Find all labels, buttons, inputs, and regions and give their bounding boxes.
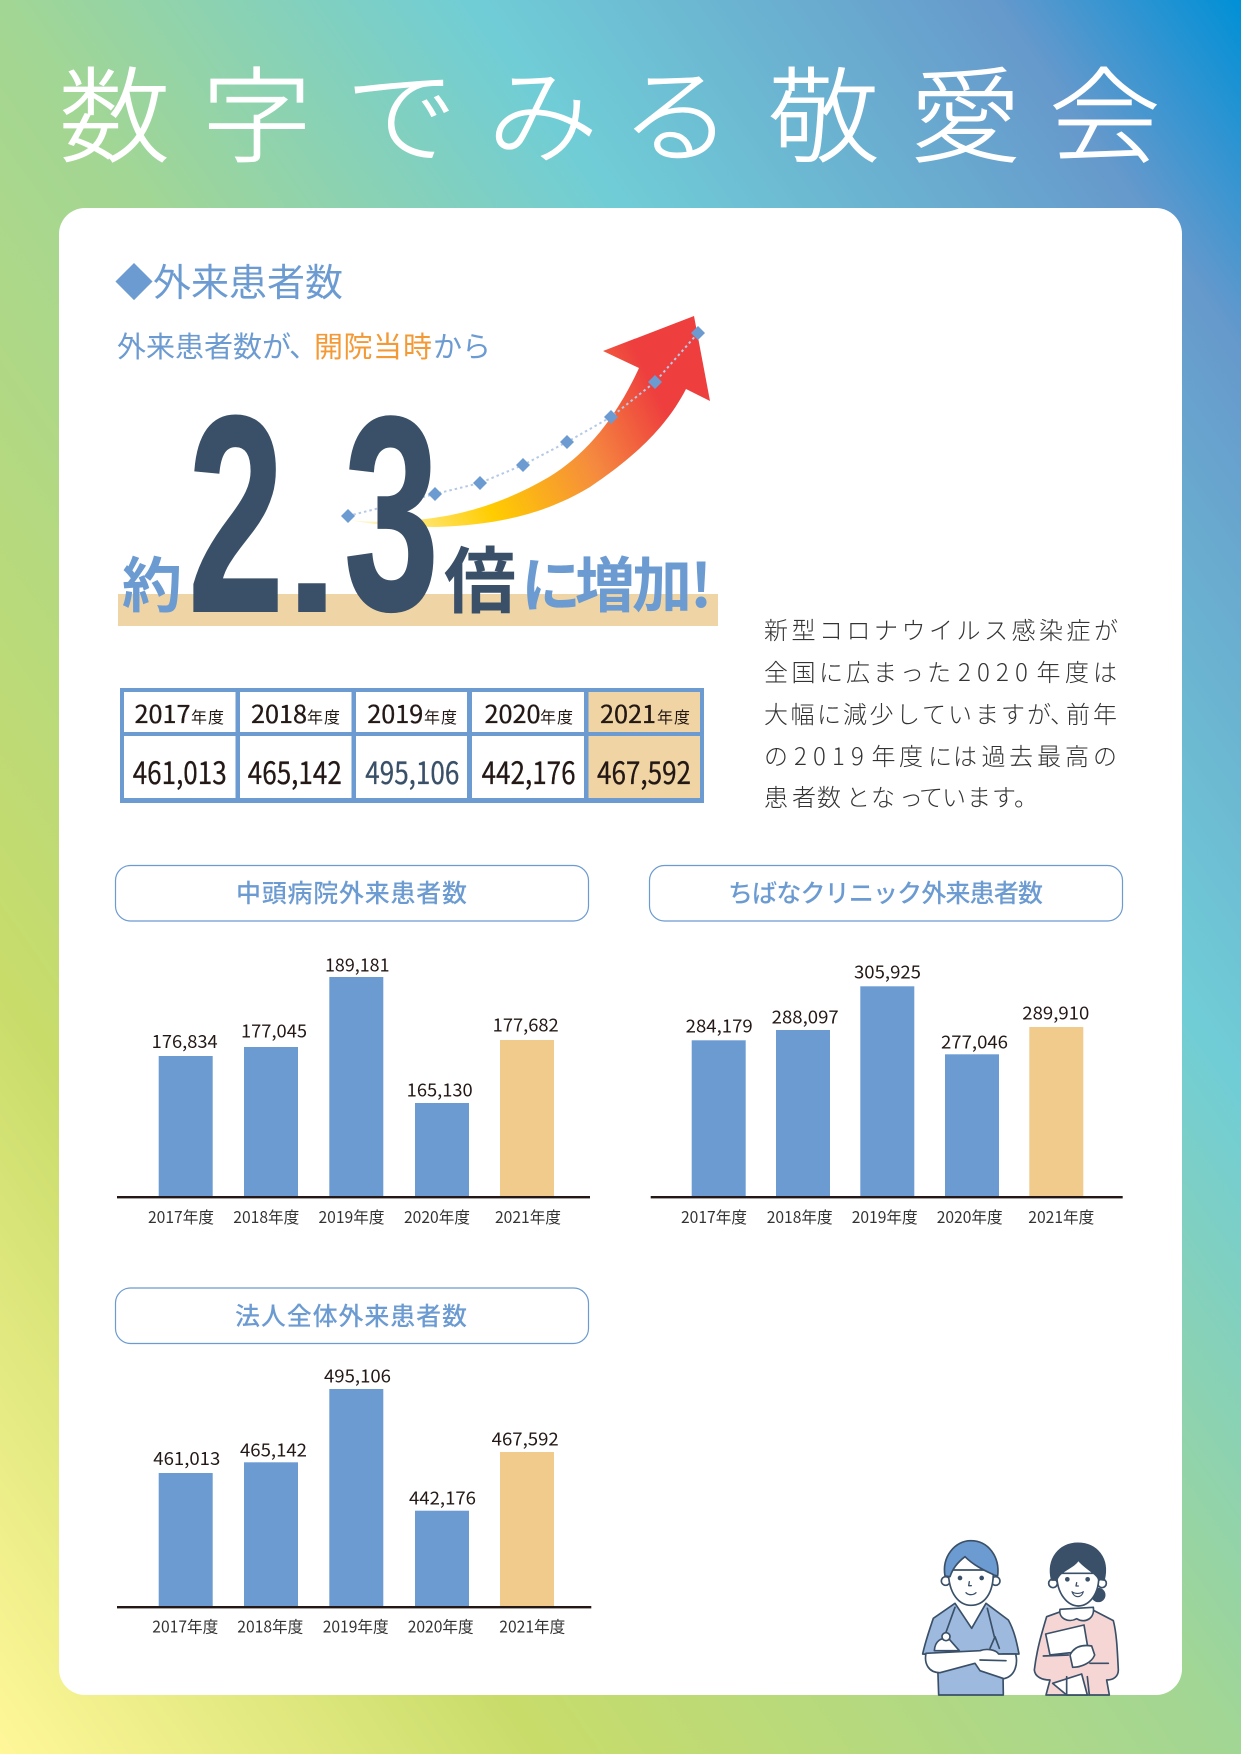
bar chart: Chibana clinic: 289,910 [1022, 999, 1089, 1025]
bar chart: Chibana clinic: 2018年度 [767, 1204, 833, 1228]
bar chart: whole corporation [117, 1362, 591, 1638]
bar chart: Nakagami hospital: 189,181 [325, 952, 390, 978]
text block: explanation: 全国に広まった2020年度は [764, 653, 1117, 688]
bar chart: whole corporation: 2020年度 [408, 1614, 474, 1638]
bar chart: whole corporation: 2017年度 [152, 1614, 218, 1638]
bar chart: Nakagami hospital: 2018年度 [233, 1204, 299, 1228]
bar chart: whole corporation: 2019年度 [323, 1614, 389, 1638]
headline: about 2.3 times increase: 2 [188, 359, 284, 671]
chart heading: whole corporation: 法人全体外来患者数 [235, 1297, 467, 1333]
icon: female nurse [1034, 1543, 1118, 1695]
bar chart: whole corporation: 2021年度 [499, 1614, 565, 1638]
chart heading: Chibana clinic [650, 866, 1122, 921]
table: yearly totals: 年度 [424, 704, 457, 728]
bar chart: whole corporation: 467,592 [492, 1426, 559, 1452]
icon: male nurse [923, 1541, 1019, 1695]
table: yearly totals: 2020 [484, 696, 540, 731]
bar chart: whole corporation: 2018年度 [237, 1614, 303, 1638]
heading: outpatient count: ◆外来患者数 [115, 252, 343, 307]
table: yearly totals: 467,592 [597, 748, 691, 793]
headline: about 2.3 times increase: 3 [344, 360, 439, 668]
table: yearly totals: 2021 [600, 696, 656, 731]
bar chart: Nakagami hospital: 2019年度 [318, 1204, 384, 1228]
bar chart: Chibana clinic [651, 958, 1123, 1228]
bar chart: Nakagami hospital [117, 952, 590, 1228]
table: yearly totals: 461,013 [133, 748, 227, 793]
bar chart: Chibana clinic: 2020年度 [937, 1204, 1003, 1228]
line chart: dotted trend with diamonds [341, 326, 705, 523]
text block: explanation [764, 611, 1118, 813]
table: yearly totals: 465,142 [248, 748, 342, 793]
bar chart: whole corporation: 461,013 [153, 1445, 220, 1471]
bar chart: Nakagami hospital: 176,834 [152, 1028, 218, 1054]
chart heading: Nakagami hospital: 中頭病院外来患者数 [236, 874, 467, 910]
text block: explanation: 大幅に減少していますが、前年 [764, 695, 1117, 730]
table: yearly totals: 2017 [134, 696, 190, 731]
subheading: since opening: 開院当時 [314, 324, 432, 366]
table: yearly totals [120, 688, 704, 803]
bar chart: whole corporation: 442,176 [409, 1484, 476, 1510]
bar chart: Chibana clinic: 2017年度 [681, 1204, 747, 1228]
headline: about 2.3 times increase [122, 359, 712, 671]
table: yearly totals: 495,106 [365, 748, 459, 793]
subheading: since opening: から [433, 324, 491, 366]
table: yearly totals: 年度 [540, 704, 573, 728]
subheading: since opening: 外来患者数が、 [117, 324, 318, 366]
bar chart: Nakagami hospital: 2021年度 [495, 1204, 561, 1228]
bar chart: Nakagami hospital: 177,045 [241, 1018, 307, 1044]
table: yearly totals: 年度 [307, 704, 340, 728]
table: yearly totals: 442,176 [482, 748, 576, 793]
chart heading: Nakagami hospital [116, 866, 588, 921]
headline: about 2.3 times increase: 倍 [444, 523, 516, 628]
bar chart: Chibana clinic: 284,179 [686, 1012, 753, 1038]
bar chart: Nakagami hospital: 2020年度 [404, 1204, 470, 1228]
table: yearly totals: 2018 [251, 696, 307, 731]
arrow: rising growth arrow [348, 316, 710, 527]
text block: explanation: 新型コロナウイルス感染症が [764, 611, 1118, 646]
panel: white card [59, 208, 1182, 1695]
title: 数字でみる敬愛会 [59, 34, 1160, 185]
table: yearly totals: 年度 [657, 704, 690, 728]
bar chart: Chibana clinic: 2019年度 [852, 1204, 918, 1228]
illustration: doctor and nurse [923, 1541, 1118, 1695]
highlight band [118, 594, 718, 626]
bar chart: Chibana clinic: 277,046 [941, 1028, 1008, 1054]
bar chart: whole corporation: 465,142 [240, 1437, 307, 1463]
text block: explanation: の2019年度には過去最高の [764, 737, 1117, 772]
bar chart: Chibana clinic: 288,097 [772, 1003, 839, 1029]
table: yearly totals: 年度 [191, 704, 224, 728]
bar chart: whole corporation: 495,106 [324, 1362, 391, 1388]
headline: about 2.3 times increase: 約 [122, 538, 182, 625]
bar chart: Nakagami hospital: 165,130 [407, 1077, 473, 1103]
headline: about 2.3 times increase: に増加! [521, 538, 712, 625]
bar chart: Chibana clinic: 305,925 [854, 958, 921, 984]
bar chart: Nakagami hospital: 2017年度 [148, 1204, 214, 1228]
table: yearly totals: 2019 [367, 696, 423, 731]
chart heading: whole corporation [116, 1288, 588, 1344]
chart heading: Chibana clinic: ちばなクリニック外来患者数 [728, 874, 1043, 910]
headline: about 2.3 times increase: . [287, 449, 337, 650]
bar chart: Nakagami hospital: 177,682 [493, 1012, 559, 1038]
bar chart: Chibana clinic: 2021年度 [1028, 1204, 1094, 1228]
text block: explanation: 患者数となっています。 [764, 778, 1038, 813]
